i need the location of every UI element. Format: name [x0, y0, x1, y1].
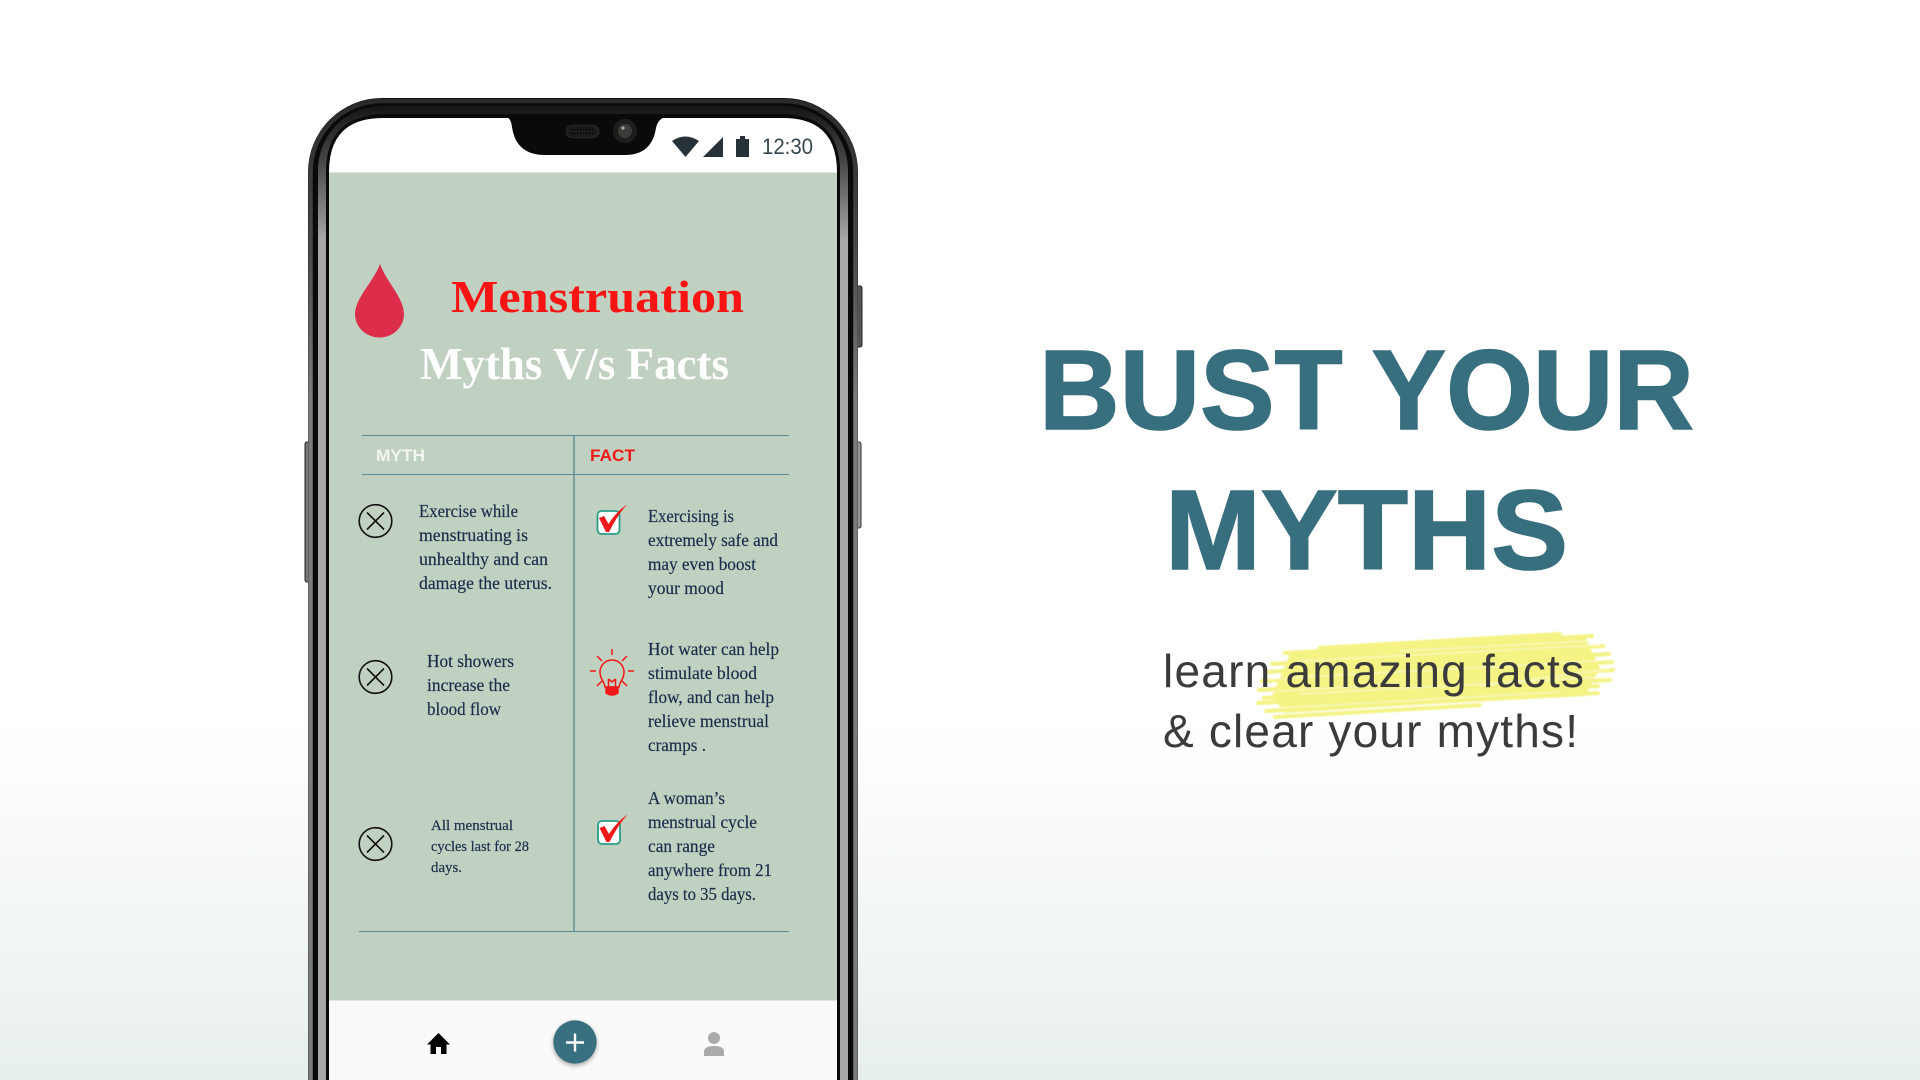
notch — [504, 116, 668, 155]
subtitle: Myths V/s Facts: Myths V/s Facts — [420, 338, 729, 389]
myth 1 text — [419, 501, 552, 593]
fact 3 text: anywhere from 21 — [648, 860, 772, 880]
myth 1 text: unhealthy and can — [419, 549, 548, 569]
tagline: & clear your myths! — [1163, 705, 1578, 757]
myth 2 text — [427, 651, 514, 719]
headline — [1039, 327, 1694, 593]
clock: 12:30 — [762, 134, 813, 159]
tagline: learn amazing facts — [1163, 645, 1584, 697]
header: MYTH: MYTH — [376, 447, 425, 465]
myth 1 text: Exercise while — [419, 501, 518, 521]
outer metal ring — [310, 101, 856, 1080]
right power button — [855, 286, 862, 347]
fact 2 icon: light bulb — [590, 649, 634, 695]
fact 2 text: cramps . — [648, 735, 706, 755]
myth 3 text: days. — [431, 860, 462, 876]
screen — [329, 118, 837, 1080]
myth 2 text: increase the — [427, 675, 510, 695]
fact 1 text: may even boost — [648, 554, 756, 574]
icon: home — [427, 1033, 450, 1054]
myth 3 icon — [359, 828, 392, 860]
fact 2 text: Hot water can help — [648, 639, 779, 659]
myth 2 text: Hot showers — [427, 651, 514, 671]
add button — [553, 1020, 597, 1064]
fact 1 text: Exercising is — [648, 506, 734, 526]
myth 3 text: cycles last for 28 — [431, 839, 529, 855]
myth 1 text: damage the uterus. — [419, 573, 552, 593]
fact 1 text: your mood — [648, 578, 724, 598]
fact 2 text: relieve menstrual — [648, 711, 769, 731]
icon: signal — [703, 137, 723, 157]
table rules — [359, 435, 789, 932]
fact 1 text — [648, 506, 778, 598]
myth 1 text: menstruating is — [419, 525, 528, 545]
front camera — [613, 119, 637, 143]
tagline — [1163, 645, 1584, 757]
myth 3 text: All menstrual — [431, 818, 513, 834]
fact 2 text: stimulate blood — [648, 663, 757, 683]
icon: wifi — [672, 136, 699, 157]
myth 3 text — [431, 818, 529, 876]
fact 3 text: menstrual cycle — [648, 812, 757, 832]
app content background — [329, 172, 837, 1000]
fact 3 text: days to 35 days. — [648, 884, 756, 904]
icon: blood drop — [355, 264, 404, 338]
title: Menstruation: Menstruation — [451, 271, 744, 322]
inner metal ring — [322, 110, 844, 1080]
fact 1 text: extremely safe and — [648, 530, 778, 550]
headline: BUST YOUR — [1039, 327, 1694, 453]
fact 2 text: flow, and can help — [648, 687, 774, 707]
fact 2 text — [648, 639, 779, 755]
myth 2 icon — [359, 661, 392, 693]
fact 3 icon: check — [598, 814, 628, 844]
headline: MYTHS — [1165, 467, 1568, 593]
myth 2 text: blood flow — [427, 699, 501, 719]
icon: battery — [736, 136, 749, 157]
fact 3 text: can range — [648, 836, 715, 856]
bezel — [326, 115, 840, 1080]
fact 1 icon: check — [598, 504, 627, 534]
myth 1 icon — [359, 505, 392, 537]
left side button — [305, 442, 310, 582]
icon: profile — [704, 1032, 724, 1056]
header: FACT: FACT — [590, 447, 635, 465]
yellow brush highlight — [1258, 634, 1613, 717]
fact 3 text — [648, 788, 772, 904]
phone body — [308, 98, 858, 1080]
bottom navigation bar — [329, 1001, 837, 1080]
right volume button — [856, 442, 861, 528]
phone mockup — [305, 98, 862, 1080]
speaker grille — [566, 125, 599, 138]
fact 3 text: A woman’s — [648, 788, 725, 808]
